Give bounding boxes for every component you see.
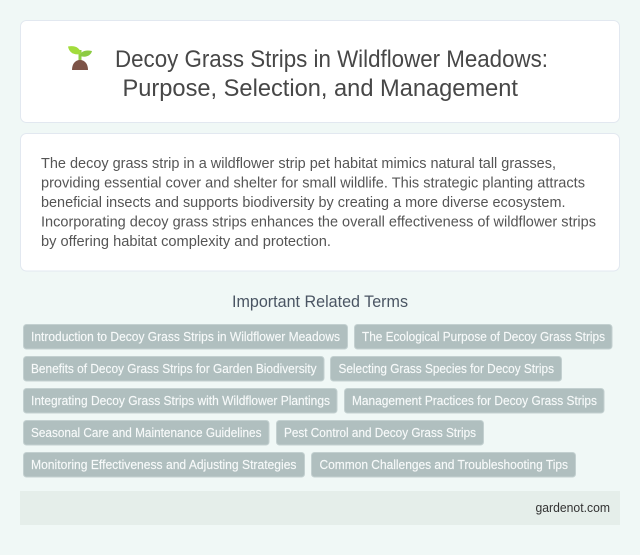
description text: The decoy grass strip in a wildflower strip pet habitat mimics natural tall grasses, <box>41 156 556 172</box>
tag <box>24 420 269 445</box>
tag: Monitoring Effectiveness and Adjusting Strategies <box>31 458 296 472</box>
tag <box>354 324 612 349</box>
icon: seedling <box>68 46 92 70</box>
tag <box>24 356 324 381</box>
tag <box>24 388 337 413</box>
tag: Selecting Grass Species for Decoy Strips <box>338 362 554 376</box>
tag: Seasonal Care and Maintenance Guidelines <box>31 426 262 440</box>
heading: important related terms: Important Related Terms <box>232 293 408 311</box>
tag <box>330 356 562 381</box>
tag: Benefits of Decoy Grass Strips for Garden Biodiversity <box>31 362 317 376</box>
description text: providing essential cover and shelter for small wildlife. This strategic planting attracts <box>41 176 585 192</box>
tag <box>344 388 604 413</box>
tag: The Ecological Purpose of Decoy Grass Strips <box>362 330 605 344</box>
panel: title card <box>20 20 620 122</box>
title text: Purpose, Selection, and Management <box>122 75 518 102</box>
tag list <box>24 324 612 477</box>
tag <box>24 324 348 349</box>
tag: Pest Control and Decoy Grass Strips <box>284 426 476 440</box>
title text: Decoy Grass Strips in Wildflower Meadows: <box>115 46 548 73</box>
footer site name: gardenot.com <box>536 501 610 515</box>
description text <box>41 156 596 250</box>
footer bar <box>20 491 620 525</box>
tag: Integrating Decoy Grass Strips with Wildflower Plantings <box>31 394 330 408</box>
description text: Incorporating decoy grass strips enhances the overall effectiveness of wildflower strips <box>41 214 596 230</box>
description text: by offering habitat complexity and protection. <box>41 234 331 250</box>
tag: Management Practices for Decoy Grass Strips <box>352 394 597 408</box>
tag <box>276 420 484 445</box>
tag <box>312 452 576 477</box>
description text: beneficial insects and supports biodiversity by creating a more diverse ecosystem. <box>41 195 566 211</box>
panel: description card <box>20 134 620 271</box>
tag: Introduction to Decoy Grass Strips in Wildflower Meadows <box>31 330 340 344</box>
title text <box>115 46 548 102</box>
tag: Common Challenges and Troubleshooting Tips <box>320 458 568 472</box>
tag <box>24 452 304 477</box>
